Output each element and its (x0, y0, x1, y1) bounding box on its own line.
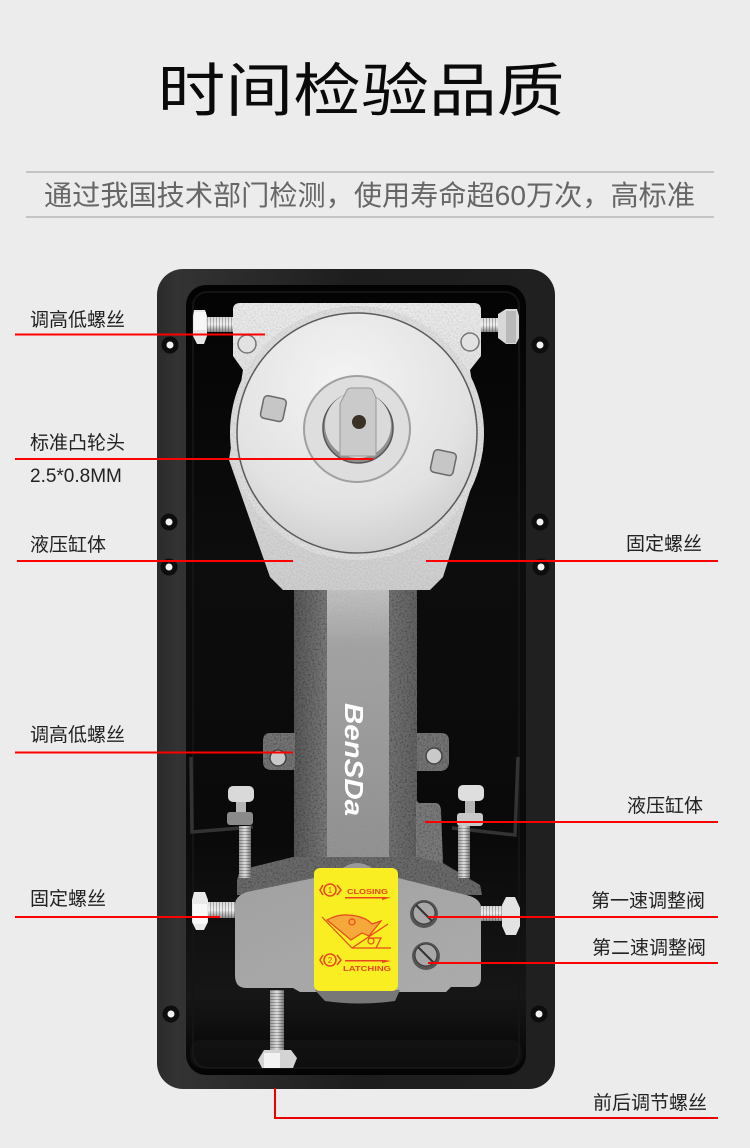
closing arrow (345, 897, 391, 900)
latching arrow (345, 960, 391, 963)
callout: standard cam head: 2.5*0.8MM (30, 466, 122, 487)
callout: front-back adjusting screw (275, 1088, 718, 1118)
top adjusting bolts (193, 309, 519, 344)
title: 时间检验品质 (158, 59, 564, 124)
vertical levelling screws (227, 785, 484, 878)
dial icon 2 (320, 954, 341, 966)
housing tray (157, 269, 555, 1089)
callout: fixing screw left: 固定螺丝 (30, 888, 106, 910)
casting head body (229, 303, 484, 590)
callout: front-back adjusting screw: 前后调节螺丝 (593, 1092, 707, 1114)
callout: hydraulic cylinder right: 液压缸体 (627, 795, 703, 817)
subtitle band: 通过我国技术部门检测，使用寿命超60万次，高标准 (44, 180, 695, 211)
callout: first speed valve: 第一速调整阀 (591, 890, 705, 912)
latching label: LATCHING (343, 964, 391, 973)
cam head shaft (304, 376, 410, 482)
callout: height screw mid: 调高低螺丝 (30, 724, 125, 746)
callout: fixing screw right: 固定螺丝 (626, 533, 702, 555)
callout: hydraulic cylinder left: 液压缸体 (30, 534, 106, 556)
stem mounting lugs (263, 733, 449, 771)
yellow instruction label (314, 868, 398, 991)
side bolts (192, 892, 520, 935)
callout: standard cam head (15, 432, 373, 487)
cover disc (237, 313, 477, 553)
brand text: BenSDa (339, 703, 369, 816)
callout: standard cam head: 标准凸轮头 (30, 432, 125, 454)
valve screws (410, 900, 440, 970)
dial number 1: 1 (328, 886, 333, 895)
door swing diagram (322, 915, 391, 948)
lower valve block (235, 857, 482, 1004)
dial icon 1 (320, 884, 341, 896)
top plate screws (238, 333, 479, 353)
callout: height screw top: 调高低螺丝 (30, 309, 125, 331)
product: floor closer in black housing (157, 269, 555, 1089)
closing label: CLOSING (347, 887, 388, 896)
L brackets (191, 757, 518, 835)
callout: second speed valve: 第二速调整阀 (592, 937, 706, 959)
dial number 2: 2 (328, 956, 333, 965)
hydraulic stem (294, 585, 443, 872)
front-back adjusting bolt (258, 990, 297, 1068)
housing screw holes (163, 339, 547, 1020)
